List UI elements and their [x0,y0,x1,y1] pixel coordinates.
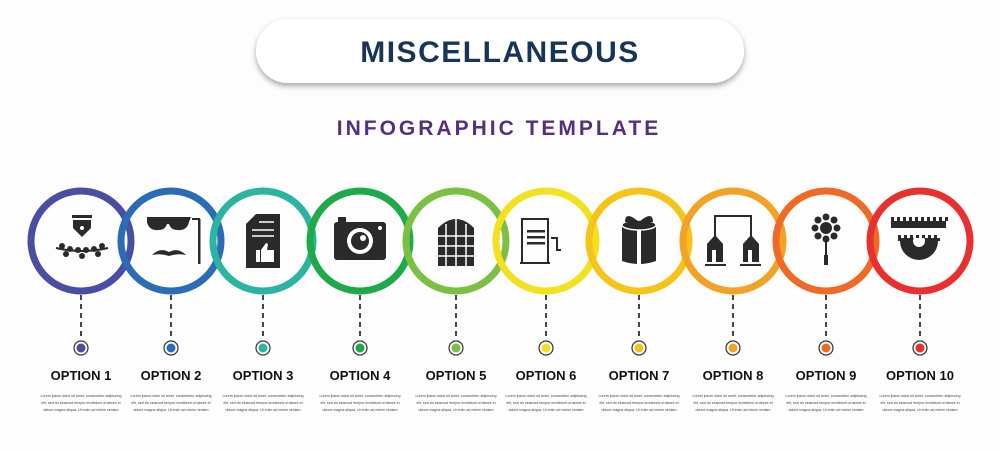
icon: arched window [438,218,474,266]
option 6: elit, sed do eiusmod tempor incididunt ut labore et [506,401,586,405]
icon: document with thumbs up [246,214,280,268]
option 6: dolore magna aliqua. Ut enim ad minim veniam [508,408,584,412]
option 1: elit, sed do eiusmod tempor incididunt ut labore et [41,401,121,405]
option 5: dolore magna aliqua. Ut enim ad minim veniam [418,408,494,412]
option 4 [310,191,410,412]
option 9: OPTION 9 [796,368,856,383]
icon: pen nib with laurel [56,215,108,259]
icon: machine with crank [520,218,561,264]
icon: glasses and mustache [147,217,200,264]
option 3: dolore magna aliqua. Ut enim ad minim veniam [225,408,301,412]
option 8: Lorem ipsum dolor sit amet, consectetur adipiscing [693,394,773,398]
icon: flower pinwheel [812,214,840,265]
icon: two silos connected [705,216,761,266]
title pill [256,19,744,83]
option 4: elit, sed do eiusmod tempor incididunt ut labore et [320,401,400,405]
option 9: Lorem ipsum dolor sit amet, consectetur adipiscing [786,394,866,398]
option 7: Lorem ipsum dolor sit amet, consectetur adipiscing [599,394,679,398]
option 6: Lorem ipsum dolor sit amet, consectetur adipiscing [506,394,586,398]
option 2: elit, sed do eiusmod tempor incididunt ut labore et [131,401,211,405]
icon: camera [334,217,386,260]
icon: rack and gear [891,217,948,260]
option 2: Lorem ipsum dolor sit amet, consectetur adipiscing [131,394,211,398]
option 7: OPTION 7 [609,368,669,383]
icon: gift box [622,216,656,264]
option 1: Lorem ipsum dolor sit amet, consectetur adipiscing [41,394,121,398]
option 4: dolore magna aliqua. Ut enim ad minim veniam [322,408,398,412]
option 5: Lorem ipsum dolor sit amet, consectetur adipiscing [416,394,496,398]
option 9 [776,191,876,412]
option 3: elit, sed do eiusmod tempor incididunt ut labore et [223,401,303,405]
option 5 [406,191,506,412]
option 9: dolore magna aliqua. Ut enim ad minim veniam [788,408,864,412]
option 8: dolore magna aliqua. Ut enim ad minim veniam [695,408,771,412]
option 9: elit, sed do eiusmod tempor incididunt ut labore et [786,401,866,405]
option 10: elit, sed do eiusmod tempor incididunt ut labore et [880,401,960,405]
option 10 [870,191,970,412]
option 10: dolore magna aliqua. Ut enim ad minim veniam [882,408,958,412]
option 8: OPTION 8 [703,368,763,383]
option 3 [213,191,313,412]
option 6 [496,191,596,412]
option 8: elit, sed do eiusmod tempor incididunt ut labore et [693,401,773,405]
subtitle: INFOGRAPHIC TEMPLATE [337,117,661,140]
option 1: OPTION 1 [51,368,111,383]
option 2: OPTION 2 [141,368,201,383]
option 2 [121,191,221,412]
title pill: MISCELLANEOUS [360,36,640,69]
option 8 [683,191,783,412]
option 10: OPTION 10 [886,368,954,383]
option 1: dolore magna aliqua. Ut enim ad minim veniam [43,408,119,412]
option 7 [589,191,689,412]
option 4: Lorem ipsum dolor sit amet, consectetur adipiscing [320,394,400,398]
option 2: dolore magna aliqua. Ut enim ad minim veniam [133,408,209,412]
option 5: elit, sed do eiusmod tempor incididunt ut labore et [416,401,496,405]
option 1 [31,191,131,412]
option 6: OPTION 6 [516,368,576,383]
option 7: dolore magna aliqua. Ut enim ad minim veniam [601,408,677,412]
option 10: Lorem ipsum dolor sit amet, consectetur adipiscing [880,394,960,398]
option 4: OPTION 4 [330,368,391,383]
option 5: OPTION 5 [426,368,486,383]
option 3: Lorem ipsum dolor sit amet, consectetur adipiscing [223,394,303,398]
option 3: OPTION 3 [233,368,293,383]
option 7: elit, sed do eiusmod tempor incididunt ut labore et [599,401,679,405]
